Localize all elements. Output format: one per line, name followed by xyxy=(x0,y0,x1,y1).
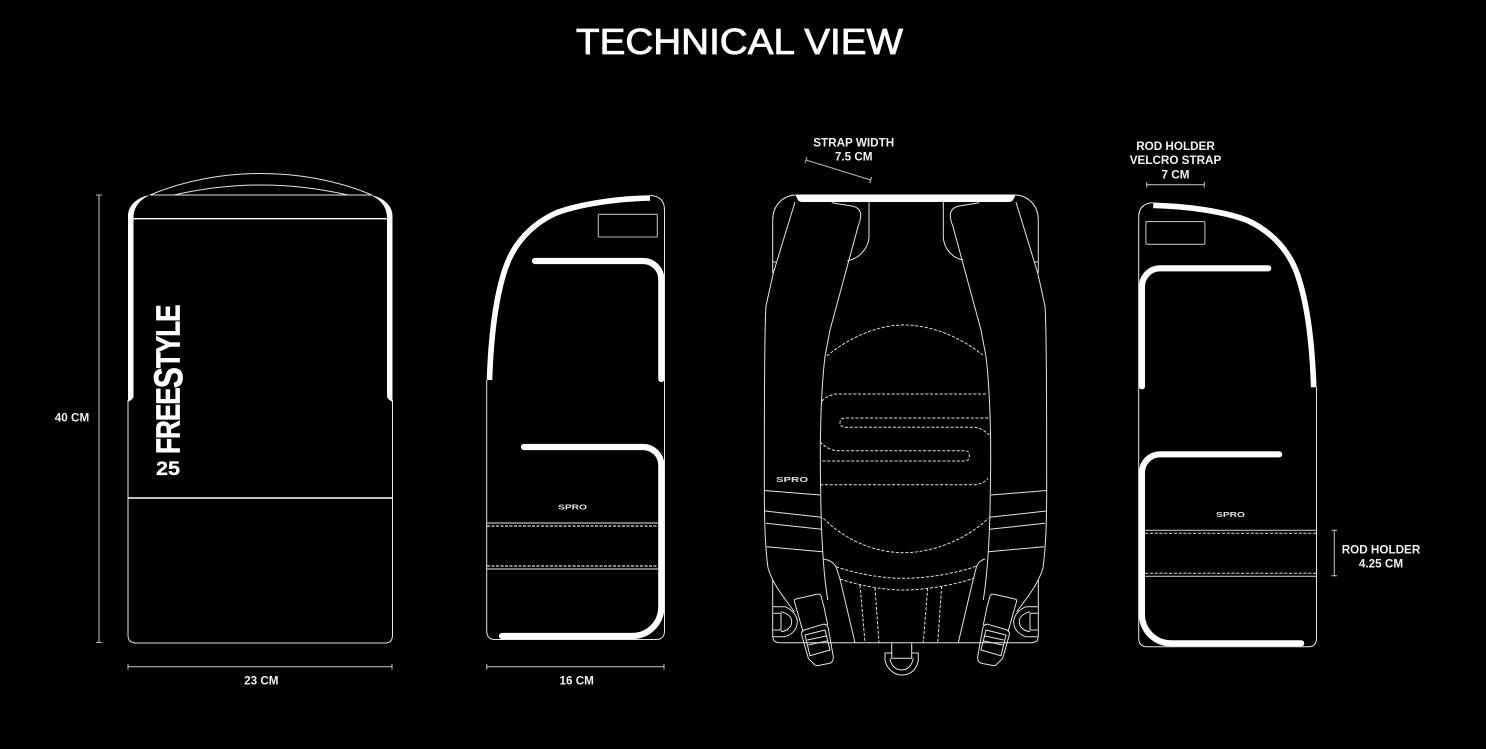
velcro strap dimension xyxy=(1147,182,1204,188)
velcro strap label: VELCRO STRAP xyxy=(1130,154,1221,167)
brand name: FREE xyxy=(151,388,187,454)
capacity number: 25 xyxy=(156,458,180,480)
curved front band xyxy=(1153,205,1314,387)
brand name: S xyxy=(145,368,191,388)
top band xyxy=(795,194,1016,202)
seam lines xyxy=(128,219,392,498)
panel: right side view xyxy=(1130,140,1421,647)
lower pocket band xyxy=(1142,454,1301,643)
panel: back view xyxy=(764,136,1047,675)
label patch xyxy=(598,214,657,237)
logo: SPRO xyxy=(558,504,588,512)
curved front band xyxy=(490,198,650,380)
rod holder label: 4.25 CM xyxy=(1359,557,1403,570)
bag outline xyxy=(128,195,392,643)
width dimension xyxy=(128,664,392,670)
brand name: TYLE xyxy=(151,305,187,368)
left D-ring xyxy=(773,607,797,637)
right side band xyxy=(370,195,392,402)
logo: SPRO xyxy=(1216,512,1246,519)
left strap webbing xyxy=(764,490,822,552)
strap width label: STRAP WIDTH xyxy=(813,136,894,149)
right buckle xyxy=(978,624,1009,666)
right strap webbing xyxy=(989,490,1047,552)
left buckle xyxy=(802,624,833,666)
title: TECHNICAL VIEW xyxy=(576,21,903,62)
velcro strap label: 7 CM xyxy=(1162,168,1189,181)
rod holder dimension xyxy=(1332,530,1337,576)
rod holder stitching xyxy=(1145,530,1316,576)
upper pocket band xyxy=(1142,268,1268,386)
right shoulder strap xyxy=(950,202,1047,612)
left strap end xyxy=(794,594,828,632)
left side band xyxy=(128,195,150,402)
upper pocket band xyxy=(535,261,661,379)
strap width dimension xyxy=(805,157,872,183)
logo: SPRO xyxy=(776,477,809,484)
bag outline xyxy=(487,196,664,640)
rod holder stitching xyxy=(487,523,658,569)
lower pocket band xyxy=(502,447,661,636)
velcro strap label: ROD HOLDER xyxy=(1136,140,1215,153)
rod holder dashes xyxy=(487,526,658,566)
label patch xyxy=(1146,222,1205,244)
panel: left side view xyxy=(487,196,664,687)
left shoulder strap xyxy=(764,202,861,612)
bottom D-ring xyxy=(885,643,918,675)
strap width label: 7.5 CM xyxy=(835,150,873,163)
mirrored bag drawing xyxy=(1139,203,1316,647)
lower panel stitching xyxy=(836,566,977,643)
neck panel lines xyxy=(847,202,963,261)
height dimension xyxy=(96,195,102,642)
width label: 23 CM xyxy=(244,674,279,687)
right D-ring xyxy=(1014,607,1038,637)
padded back stitching xyxy=(820,325,989,553)
height label: 40 CM xyxy=(55,412,89,424)
right strap end xyxy=(983,594,1017,632)
carry handle xyxy=(150,174,372,195)
width dimension xyxy=(487,664,664,670)
back panel outline xyxy=(773,195,1038,643)
panel: front view xyxy=(55,174,392,687)
rod holder label: ROD HOLDER xyxy=(1342,543,1420,556)
rod holder dashes xyxy=(1145,533,1316,573)
bag outline xyxy=(1139,203,1316,647)
width label: 16 CM xyxy=(559,674,594,687)
lower panel xyxy=(823,559,985,643)
